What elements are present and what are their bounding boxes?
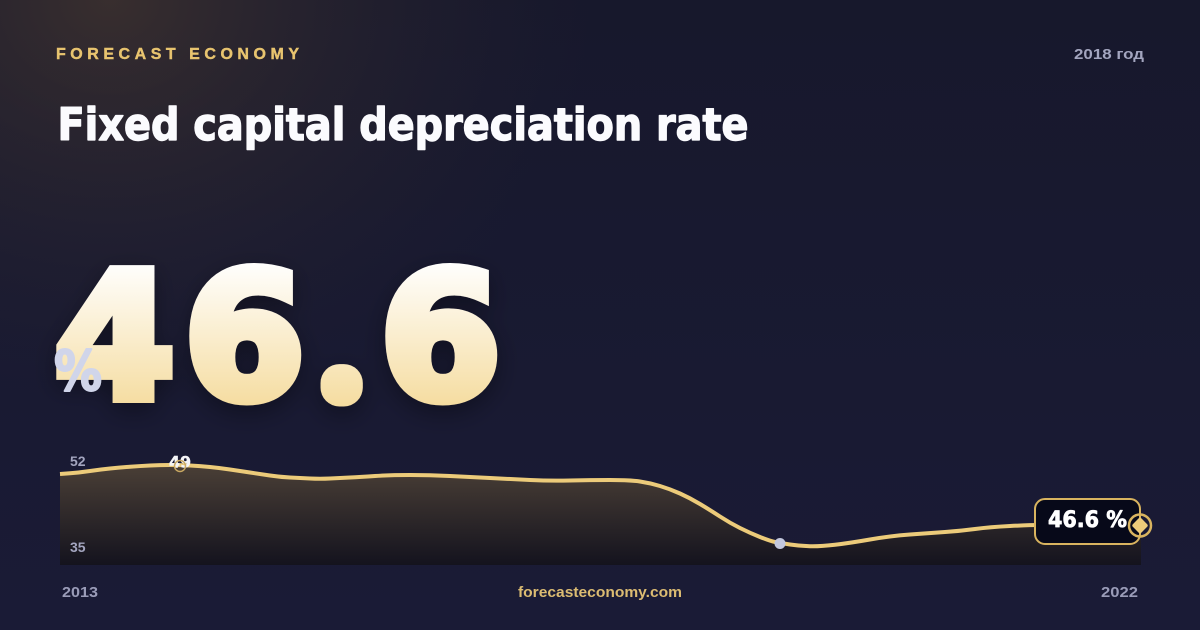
brand label: FORECAST ECONOMY [56, 46, 299, 63]
percent sign: % [54, 339, 102, 403]
chart area [60, 465, 1141, 565]
title: Fixed capital depreciation rate [58, 100, 748, 151]
axis min: 35 [70, 539, 86, 555]
peak marker [174, 460, 186, 472]
callout: 46.6 % [1048, 508, 1127, 533]
peak label: 49 [169, 452, 191, 472]
axis max: 52 [70, 453, 86, 469]
source: forecasteconomy.com [518, 584, 682, 601]
big value: . [338, 362, 346, 394]
big value: 6 [380, 236, 501, 440]
start year: 2013 [62, 584, 98, 601]
end marker [1129, 514, 1151, 536]
year label: 2018 год [1074, 46, 1145, 63]
big value: 46 [54, 236, 305, 440]
callout [1035, 499, 1140, 544]
trend line [60, 465, 1040, 546]
low marker [774, 538, 786, 549]
end year: 2022 [1101, 584, 1138, 601]
area chart [60, 452, 1151, 565]
